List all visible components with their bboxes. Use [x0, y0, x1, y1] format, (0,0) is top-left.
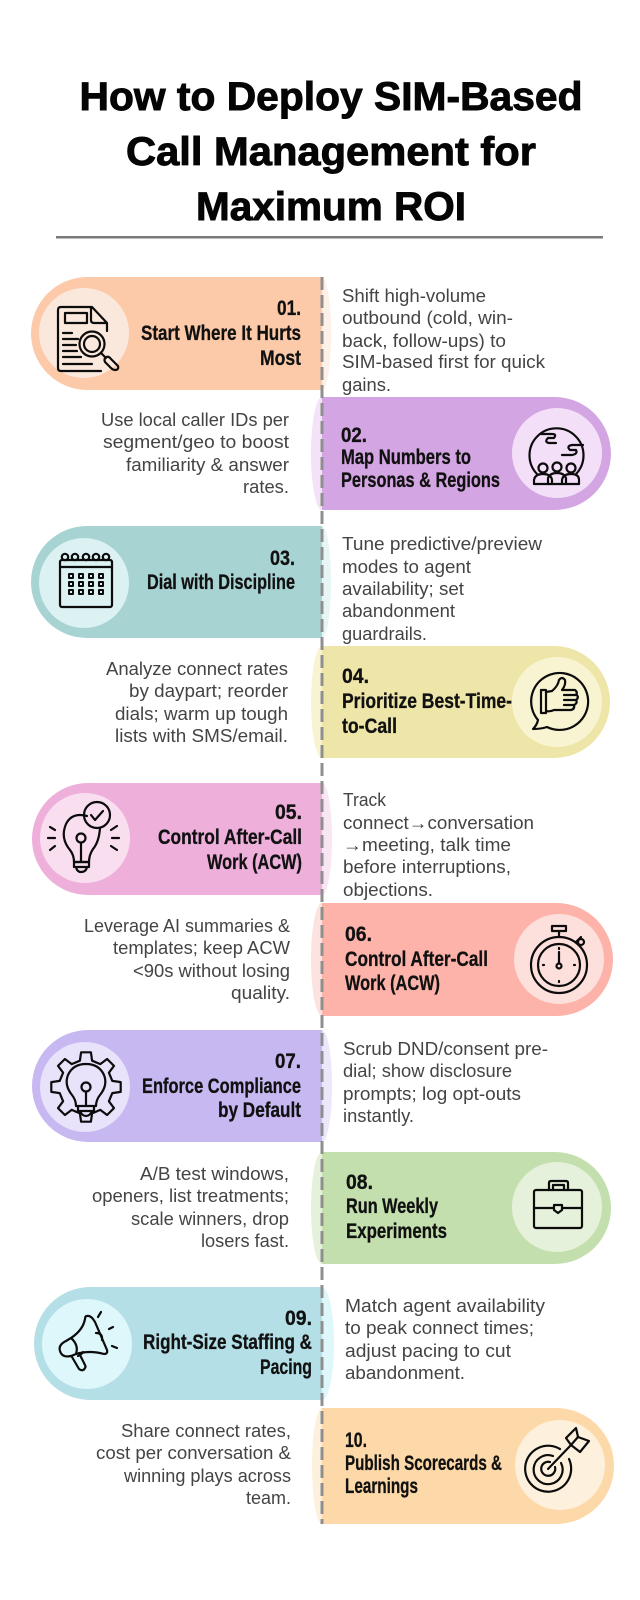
description 06: <90s without losing	[133, 961, 290, 981]
heading 02: Map Numbers to	[341, 446, 471, 469]
heading 01: 01.	[277, 297, 301, 320]
heading 10	[345, 1429, 502, 1498]
heading 09: Pacing	[260, 1356, 312, 1379]
title	[80, 75, 582, 229]
heading 05: Work (ACW)	[207, 851, 302, 874]
description 03: guardrails.	[342, 624, 427, 644]
description 03: availability; set	[342, 579, 464, 599]
description 09: abandonment.	[345, 1363, 465, 1383]
description 06: quality.	[231, 983, 290, 1003]
description 09: Match agent availability	[345, 1296, 545, 1316]
description 09	[345, 1296, 545, 1383]
heading 05: Control After-Call	[158, 826, 302, 849]
description 06: templates; keep ACW	[113, 938, 290, 958]
heading 04: Prioritize Best-Time-	[342, 690, 512, 713]
panel: step 04	[106, 646, 610, 758]
description 07: instantly.	[343, 1106, 414, 1126]
heading 03: Dial with Discipline	[147, 571, 295, 594]
description 08: openers, list treatments;	[92, 1186, 289, 1206]
icon: target with arrow	[525, 1428, 589, 1492]
description 04	[106, 659, 288, 746]
description 05: Track	[343, 790, 387, 810]
description 02	[101, 410, 289, 497]
panel: step 07	[32, 1030, 548, 1142]
heading 02: Personas & Regions	[341, 469, 500, 492]
panel: step 06	[84, 903, 613, 1016]
heading 04: to-Call	[342, 715, 397, 738]
panel: step 03	[31, 526, 543, 644]
description 05	[343, 790, 534, 900]
icon: globe with people	[530, 428, 584, 484]
description 01: outbound (cold, win-	[342, 308, 513, 328]
description 01: SIM-based first for quick	[342, 352, 546, 372]
title: How to Deploy SIM-Based	[80, 75, 582, 119]
description 05: objections.	[343, 880, 433, 900]
heading 01: Start Where It Hurts	[141, 322, 301, 345]
heading 04	[342, 665, 512, 738]
description 08: losers fast.	[201, 1231, 289, 1251]
description 10	[96, 1421, 291, 1508]
icon: document with magnifier	[58, 307, 118, 371]
description 01: Shift high-volume	[342, 286, 486, 306]
description 03: modes to agent	[342, 557, 471, 577]
description 02: rates.	[243, 477, 289, 497]
panel: step 02	[101, 397, 611, 510]
description 08: A/B test windows,	[140, 1164, 289, 1184]
description 03: Tune predictive/preview	[342, 534, 543, 554]
description 07	[343, 1039, 548, 1126]
description 09: to peak connect times;	[345, 1318, 534, 1338]
heading 01: Most	[260, 347, 301, 370]
description 02: segment/geo to boost	[103, 432, 289, 452]
description 08	[92, 1164, 289, 1251]
heading 02	[341, 424, 500, 492]
icon: gear with bulb	[51, 1052, 121, 1122]
icon: megaphone	[60, 1312, 117, 1370]
heading 07: by Default	[218, 1099, 301, 1122]
heading 09: 09.	[285, 1307, 312, 1330]
heading 03: 03.	[270, 547, 295, 570]
heading 07	[142, 1050, 301, 1122]
icon: thumbs up speech bubble	[531, 673, 588, 730]
panel: step 01	[31, 277, 546, 395]
heading 05: 05.	[275, 801, 302, 824]
description 08: scale winners, drop	[131, 1209, 289, 1229]
heading 08: Experiments	[346, 1220, 447, 1243]
description 01: gains.	[342, 375, 391, 395]
description 04: by daypart; reorder	[129, 681, 288, 701]
heading 07: 07.	[275, 1050, 301, 1073]
description 10: team.	[246, 1488, 291, 1508]
description 05: →meeting, talk time	[343, 835, 511, 855]
description 07: Scrub DND/consent pre-	[343, 1039, 548, 1059]
description 03	[342, 534, 543, 644]
description 05: connect→conversation	[343, 813, 534, 833]
description 01: back, follow-ups) to	[342, 331, 506, 351]
title: Call Management for	[126, 130, 536, 174]
panel: step 10	[96, 1408, 614, 1524]
panel: step 05	[32, 783, 534, 900]
icon: briefcase	[534, 1181, 582, 1228]
heading 05	[158, 801, 302, 874]
icon: light bulb with check	[48, 802, 119, 872]
heading 06: 06.	[345, 923, 372, 946]
heading 06: Control After-Call	[345, 948, 488, 971]
description 10: Share connect rates,	[121, 1421, 291, 1441]
heading 10: Learnings	[345, 1475, 418, 1498]
description 04: dials; warm up tough	[115, 704, 288, 724]
panel: step 08	[92, 1152, 611, 1264]
heading 09	[143, 1307, 312, 1379]
heading 07: Enforce Compliance	[142, 1075, 301, 1098]
description 07: dial; show disclosure	[343, 1061, 512, 1081]
description 10: winning plays across	[123, 1466, 291, 1486]
description 01	[342, 286, 546, 395]
heading 08	[346, 1171, 447, 1243]
icon: stopwatch	[531, 926, 587, 993]
description 02: familiarity & answer	[126, 455, 289, 475]
description 10: cost per conversation &	[96, 1443, 291, 1463]
description 06	[84, 916, 290, 1003]
heading 08: Run Weekly	[346, 1195, 438, 1218]
description 04: Analyze connect rates	[106, 659, 288, 679]
heading 01	[141, 297, 301, 370]
description 04: lists with SMS/email.	[115, 726, 288, 746]
heading 08: 08.	[346, 1171, 373, 1194]
heading 09: Right-Size Staffing &	[143, 1331, 312, 1354]
description 09: adjust pacing to cut	[345, 1341, 511, 1361]
heading 02: 02.	[341, 424, 367, 447]
panel: step 09	[34, 1287, 545, 1400]
icon: calendar	[60, 554, 112, 607]
heading 06	[345, 923, 488, 995]
heading 10: 10.	[345, 1429, 367, 1452]
description 03: abandonment	[342, 601, 455, 621]
title: Maximum ROI	[196, 185, 466, 229]
description 05: before interruptions,	[343, 857, 511, 877]
heading 10: Publish Scorecards &	[345, 1452, 502, 1475]
description 07: prompts; log opt-outs	[343, 1084, 521, 1104]
description 02: Use local caller IDs per	[101, 410, 289, 430]
description 06: Leverage AI summaries &	[84, 916, 290, 936]
heading 03	[147, 547, 295, 594]
heading 06: Work (ACW)	[345, 972, 440, 995]
heading 04: 04.	[342, 665, 369, 688]
